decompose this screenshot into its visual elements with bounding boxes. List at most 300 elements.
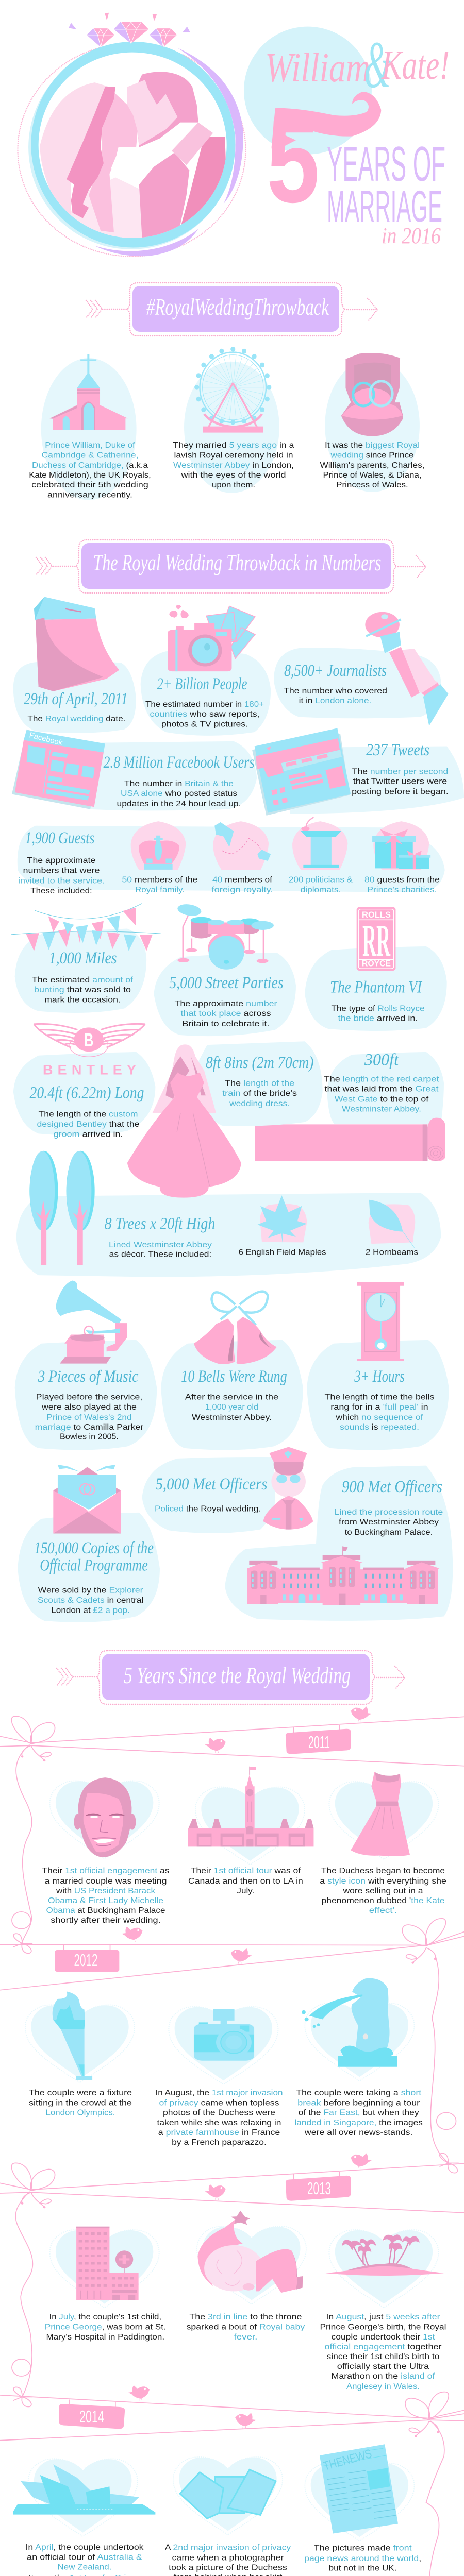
panel: 3 pieces of music — [15, 1280, 157, 1450]
year: 2012: 2012 — [74, 1951, 98, 1970]
title: William: William — [265, 45, 370, 91]
year: 2014: 2014 — [79, 2407, 104, 2426]
heart background — [305, 2463, 414, 2541]
text: married in Westminster Abbey: with the eyes of the world — [180, 471, 286, 480]
panel: the Phantom VI — [305, 907, 447, 1031]
text: biggest wedding — [320, 441, 425, 489]
icon: hornbeam leaf — [369, 1200, 415, 1248]
text: hours: which no sequence of — [335, 1413, 423, 1422]
text: tweets: The number per second — [352, 768, 448, 776]
text: programmes — [38, 1586, 143, 1615]
icon: photographs — [180, 2470, 276, 2518]
text: guests breakdown: 80 guests from the — [364, 875, 440, 884]
icon: Facebook page — [12, 730, 105, 809]
text: biggest wedding: It was the biggest Royal — [325, 441, 420, 450]
panel: 2012 Singapore — [294, 1978, 423, 2137]
text: hours: The length of time the bells — [325, 1393, 435, 1401]
timeline ribbons and signs — [0, 1706, 464, 2576]
heading: 3+ Hours: 3+ Hours — [354, 1367, 405, 1386]
icon: maple leaf — [257, 1195, 307, 1243]
heading: 29th of April, 2011: 29th of April, 2011 — [24, 690, 128, 708]
panel: Bentley — [13, 1024, 155, 1139]
title: in 2016: in 2016 — [382, 223, 441, 248]
icon: envelope — [53, 1465, 121, 1534]
ribbon: small loop 2012 — [437, 2112, 456, 2129]
text: wedding date: The Royal wedding date. — [27, 715, 125, 723]
text: Facebook users: updates in the 24 hour lead up. — [117, 800, 241, 808]
text: street parties — [174, 999, 277, 1028]
banner: The Royal Wedding Throwback in Numbers — [36, 540, 426, 593]
background blob — [15, 929, 146, 1013]
text: Anglesey: In August , just 5 weeks after — [326, 2313, 440, 2321]
text: second invasion: A 2nd major invasion of privacy — [165, 2543, 291, 2552]
text: bells: 1,000 year old — [205, 1403, 258, 1412]
text: biggest wedding: William's parents, Charles, — [320, 461, 425, 470]
icon: bunting — [11, 904, 161, 951]
text: bunting: The estimated amount of — [32, 976, 134, 985]
background blob — [154, 953, 296, 1036]
text: guests intro: These included: — [30, 887, 92, 895]
text: guests intro: The approximate — [27, 856, 95, 865]
icon: Sydney Opera House — [13, 2464, 155, 2515]
text: lined the route: to Buckingham Palace. — [345, 1528, 433, 1537]
heart background — [197, 2226, 306, 2304]
heading: 150,000 Copies of the Official Programme: 150,000 Copies of the — [34, 1539, 154, 1557]
panel: 2+ billion people — [141, 605, 271, 736]
text: Olympics: sitting in the crowd at the — [29, 2099, 132, 2107]
banner: #RoyalWeddingThrowback — [86, 283, 377, 336]
background blob — [225, 1466, 453, 1621]
panel: 237 tweets — [252, 728, 464, 816]
icon: red carpet roll — [255, 1118, 445, 1161]
text: carpet: West Gate to the top of — [335, 1095, 429, 1104]
icon: crown — [139, 836, 179, 870]
year: 2011: 2011 — [308, 1733, 330, 1752]
text: street parties: that took place across — [180, 1009, 271, 1018]
icon: Twitter page — [252, 728, 351, 816]
text: trees — [109, 1241, 212, 1259]
icon: Olympic torch — [53, 1991, 92, 2080]
portrait: couple kissing — [40, 72, 226, 238]
text: guests intro: invited to the service. — [18, 877, 105, 886]
heading: 20.4ft (6.22m) Long: 20.4ft (6.22m) Long — [30, 1083, 144, 1102]
icon backgrounds — [131, 821, 429, 870]
text: first engagement — [42, 1867, 170, 1925]
heading: 3 Pieces of Music: 3 Pieces of Music — [38, 1367, 139, 1386]
text: Phantom: The type of Rolls Royce — [331, 1005, 425, 1013]
text: Olympics: The couple were a fixture — [29, 2089, 132, 2097]
text: Australia tour — [26, 2543, 144, 2576]
heading: 1,000 Miles: 1,000 Miles — [49, 949, 117, 968]
icon: police officer — [263, 1447, 313, 1530]
icon: Merlion — [302, 1978, 397, 2067]
ribbon: left string 2013 — [15, 2192, 29, 2226]
ribbon junction: 2013 sign — [0, 2154, 464, 2213]
text: Anglesey: since their 1st child's birth to — [327, 2352, 439, 2361]
heading: 300ft: 300ft — [364, 1051, 399, 1070]
text: Bentley: The length of the custom — [38, 1110, 138, 1119]
background blob — [305, 946, 447, 1031]
icon: plane and route — [214, 822, 271, 861]
heading: 150,000 Copies of the Official Programme — [34, 1539, 154, 1574]
text: Facebook users: USA alone who posted status — [121, 789, 237, 798]
text: bells — [185, 1393, 278, 1422]
background blob — [177, 1041, 323, 1126]
heart background — [50, 1781, 159, 1859]
heading: 150,000 Copies of the Official Programme: Official Programme — [40, 1556, 148, 1574]
icon: Obama portrait — [74, 1777, 136, 1857]
panel: 1,000 miles of bunting — [11, 904, 161, 1013]
panel: 2011 style icon — [320, 1772, 446, 1915]
logo text: Bentley: BENTLEY — [43, 1062, 136, 1078]
text: train: wedding dress. — [229, 1099, 290, 1108]
text: music: Bowles in 2005. — [60, 1433, 119, 1442]
text: married in Westminster Abbey: upon them. — [212, 481, 255, 489]
heading: 10 Bells Were Rung: 10 Bells Were Rung — [181, 1367, 287, 1386]
heart background — [305, 2003, 414, 2081]
panel: 2014 Australia tour — [13, 2459, 155, 2576]
background blob — [307, 1340, 449, 1450]
panel: 2012 Olympics — [25, 1991, 135, 2117]
heading: 1,900 Guests: 1,900 Guests — [25, 829, 95, 848]
text: journalists: it in London alone. — [299, 697, 371, 705]
text: bunting — [32, 976, 134, 1005]
heading: 2+ Billion People: 2+ Billion People — [157, 675, 247, 693]
icon: gramophone — [56, 1280, 127, 1364]
text: Phantom: the bride arrived in. — [338, 1014, 418, 1023]
panel: 10 bells — [161, 1292, 303, 1450]
text: tweets: posting before it began. — [352, 787, 449, 796]
text: guests intro — [18, 856, 105, 895]
icon: podium — [301, 817, 342, 868]
text: first tour: July. — [237, 1887, 254, 1895]
text: Australia tour: In April , the couple undertook — [26, 2543, 144, 2552]
text: Phantom — [331, 1005, 425, 1023]
text: music: Prince of Wales's 2nd — [46, 1413, 132, 1422]
heading: 5,000 Street Parties: 5,000 Street Parties — [169, 974, 284, 992]
background blob — [327, 1052, 444, 1124]
text: bunting: bunting that was sold to — [34, 986, 131, 994]
ribbon: small loop 2013 — [12, 2359, 31, 2376]
icon: Kate dress — [351, 1772, 410, 1856]
panel: 3+ hours — [307, 1282, 449, 1450]
heart background — [329, 2230, 439, 2308]
panel: 2011 Obama engagement — [42, 1777, 170, 1925]
text: first engagement: Obama at Buckingham Palace — [46, 1906, 165, 1915]
panel: 5,000 street parties — [154, 902, 296, 1036]
background blob — [274, 648, 441, 718]
text: guests breakdown: 200 politicians & — [289, 875, 353, 884]
icon: hospital — [76, 2227, 139, 2300]
background blob — [18, 1513, 160, 1622]
icon: microphone in hand — [365, 612, 449, 726]
title background circle — [244, 27, 372, 155]
banner: #RoyalWeddingThrowback: #RoyalWeddingThrowback — [146, 294, 329, 320]
panel: 2013 island of Anglesey — [320, 2230, 446, 2391]
text: royals celebrated — [29, 441, 151, 499]
background blob — [161, 1340, 303, 1450]
heart background — [329, 1782, 439, 1859]
heart background — [28, 2459, 138, 2536]
portrait frame lilac crescent — [95, 48, 243, 256]
panel: 1,900 guests — [18, 817, 445, 895]
text: baby fever: fever. — [234, 2333, 257, 2342]
text: bells: Westminster Abbey. — [192, 1413, 272, 1422]
text: hours: rang for in a 'full peal' in — [330, 1403, 428, 1412]
panel: 2011 Canada tour — [188, 1767, 313, 1895]
text: George born: Prince George , was born at St. — [45, 2323, 166, 2332]
text: guests breakdown: Prince's charities. — [367, 886, 437, 894]
text: journalists: The number who covered — [284, 687, 387, 696]
portrait frame pale ring — [28, 45, 234, 249]
text: married in Westminster Abbey — [173, 441, 294, 489]
text: style icon — [320, 1867, 446, 1915]
text: billion people: photos & TV pictures. — [161, 720, 248, 729]
logo text: B: B — [84, 1029, 94, 1050]
icon: paparazzo camera — [194, 2009, 254, 2061]
logo text: Royce: ROYCE — [362, 958, 391, 969]
background oval — [184, 362, 279, 493]
background blob — [141, 651, 271, 736]
numeral 5: 5 — [267, 95, 320, 227]
icon: Rolls Royce badge — [357, 907, 395, 971]
text: royals celebrated: Duchess of Cambridge, (a.k.a — [32, 461, 148, 470]
text: baby fever — [187, 2313, 305, 2342]
banner: 5 Years Since the Royal Wedding — [57, 1651, 405, 1704]
icon: camera and photos — [168, 605, 255, 671]
background blob — [142, 1457, 275, 1533]
ribbon junction: 2014 sign — [0, 2385, 464, 2441]
ribbon: small bow 2012 — [439, 2154, 459, 2173]
icon: three diamonds — [69, 13, 190, 47]
text: Australia tour: an official tour of Australia & — [27, 2553, 143, 2562]
icon: wedding bells — [194, 1292, 277, 1364]
text: Singapore: landed in Singapore, the images — [294, 2119, 423, 2127]
header: title and portrait — [18, 13, 450, 257]
heading: The Phantom VI: The Phantom VI — [330, 978, 423, 996]
text: Anglesey: Anglesey in Wales. — [346, 2382, 420, 2391]
ribbon: small loop 2011 — [12, 1912, 31, 1929]
text: guests breakdown: Royal family. — [135, 886, 185, 894]
text: journalists — [284, 687, 387, 705]
text: carpet: that was laid from the Great — [325, 1084, 439, 1093]
text: guests breakdown: 50 members of the — [122, 875, 198, 884]
text: royals celebrated: anniversary recently. — [47, 490, 132, 499]
text: Anglesey — [320, 2313, 446, 2391]
text: first engagement: with US President Barack — [56, 1887, 155, 1895]
text: music — [35, 1393, 143, 1442]
text: Facebook users: The number in Britain & the — [124, 779, 234, 788]
icon: wedding dress — [127, 1044, 241, 1198]
text: Bentley: designed Bentley that the — [37, 1120, 139, 1129]
text: guests breakdown — [122, 875, 440, 894]
text: Singapore: of the Far East, but when they — [299, 2108, 419, 2117]
text: style icon: phenomenon dubbed ' the Kate — [322, 1896, 444, 1905]
background oval — [41, 358, 137, 500]
text: carpet: The length of the red carpet — [324, 1075, 439, 1083]
text: married in Westminster Abbey: They married 5 years ago in a — [173, 441, 294, 450]
panel: 150,000 programmes — [18, 1465, 160, 1622]
text: train: The length of the — [225, 1079, 294, 1088]
panel: the Phantom VI: RR — [362, 916, 391, 966]
text: policed: Policed the Royal wedding. — [155, 1504, 261, 1514]
text: front page: page news around the world , — [304, 2554, 421, 2563]
text: Anglesey: couple undertook their 1st — [331, 2333, 435, 2342]
text: trees: as décor. These included: — [109, 1250, 211, 1259]
text: lined the route: Lined the procession route — [335, 1508, 443, 1517]
text: royals celebrated: celebrated their 5th wedding — [31, 481, 148, 489]
text: guests intro: numbers that were — [23, 866, 100, 875]
icon: Canadian parliament — [188, 1767, 313, 1846]
text: first tour — [188, 1867, 303, 1895]
text: Anglesey: officially start the Ultra — [337, 2362, 429, 2371]
text: privacy: taken while she was relaxing in — [157, 2119, 281, 2127]
ribbon junction: 2011 sign — [0, 1706, 464, 1766]
text: married in Westminster Abbey: lavish Royal ceremony held in — [174, 451, 293, 460]
text: privacy: a private farmhouse in France — [158, 2128, 280, 2137]
ribbon: right string 2014 — [426, 2421, 444, 2576]
text: first engagement: Their 1st official engagement as — [42, 1867, 170, 1875]
text: first engagement: Obama & First Lady Michelle — [48, 1896, 163, 1905]
heading: 8,500+ Journalists: 8,500+ Journalists — [284, 662, 387, 680]
text: privacy — [156, 2089, 283, 2147]
text: hours — [325, 1393, 435, 1432]
text: biggest wedding: Princess of Wales. — [336, 481, 408, 489]
label: The News masthead: THENEWS — [322, 2447, 373, 2473]
text: second invasion: came when a photographer — [172, 2553, 284, 2563]
text: George born: In July, the couple's 1st child, — [49, 2313, 161, 2321]
text: hours: sounds is repeated. — [340, 1423, 419, 1432]
panel: ring box, biggest Royal wedding — [320, 353, 425, 492]
heading: 2.8 Million Facebook Users: 2.8 Million Facebook Users — [103, 753, 255, 772]
text: privacy: of privacy came when topless — [159, 2099, 279, 2107]
heart background — [169, 2007, 278, 2084]
text: married in Westminster Abbey: Westminster Abbey in London, — [173, 461, 294, 470]
text: Singapore: The couple were taking a short — [296, 2089, 422, 2097]
heart background — [195, 1787, 305, 1865]
text: second invasion: took a picture of the Duchess — [169, 2564, 287, 2572]
text: programmes: London at £2 a pop. — [51, 1606, 130, 1615]
text: Olympics: London Olympics. — [45, 2108, 115, 2117]
text: baby fever: sparked a bout of Royal baby — [187, 2323, 305, 2332]
text: Olympics — [29, 2089, 132, 2117]
text: royals celebrated: Kate Middleton), the UK Royals, — [29, 471, 151, 480]
background blob — [16, 1193, 441, 1277]
background oval — [325, 359, 420, 492]
icon: gifts — [372, 829, 430, 869]
text: street parties: The approximate number — [174, 999, 277, 1008]
text: style icon: The Duchess began to become — [321, 1867, 445, 1875]
ribbon junction: 2012 sign — [0, 1919, 464, 1990]
icon: calendar — [34, 597, 119, 691]
text: biggest wedding: wedding since Prince — [330, 451, 413, 460]
text: billion people: The estimated number in 180+ — [145, 700, 264, 709]
text: bunting: mark the occasion. — [44, 995, 121, 1005]
panel: 5,000 Met officers — [142, 1447, 313, 1533]
panel: 2013 Royal baby fever — [187, 2211, 306, 2342]
text: maples: 6 English Field Maples — [239, 1248, 326, 1257]
text: privacy: In August, the 1st major invasion — [156, 2089, 283, 2097]
icon: two trees — [29, 1151, 95, 1265]
text: programmes: Were sold by the Explorer — [38, 1586, 143, 1595]
text: Singapore — [294, 2089, 423, 2137]
text: programmes: Scouts & Cadets in central — [38, 1596, 143, 1605]
text: Singapore: break before beginning a tour — [297, 2099, 420, 2107]
text: style icon: a style icon with everything she — [320, 1877, 446, 1886]
icon: London Eye wheel — [194, 347, 271, 433]
numeral 5 swash — [272, 92, 381, 151]
heading: 900 Met Officers: 900 Met Officers — [342, 1478, 442, 1496]
text: music: were also played at the — [41, 1403, 137, 1412]
text: front page: The pictures made front — [314, 2544, 412, 2553]
panel: 2014 front page news — [304, 2444, 421, 2573]
text: Australia tour: New Zealand. — [58, 2563, 111, 2571]
background blob — [290, 747, 464, 814]
text: billion people — [145, 700, 264, 729]
text: biggest wedding: Prince of Wales, & Diana, — [323, 471, 422, 480]
text: tweets: that Twitter users were — [353, 777, 447, 786]
heart background — [173, 2457, 283, 2535]
title: ampersand: & — [364, 28, 391, 102]
panel: wedding date — [13, 597, 136, 733]
text: first tour: Canada and then on to LA in — [188, 1877, 303, 1886]
text: trees: Lined Westminster Abbey — [109, 1241, 212, 1249]
icon: drum kit — [174, 902, 274, 970]
icon: grandfather clock — [357, 1282, 404, 1361]
text: Singapore: were all over news-stands. — [304, 2128, 412, 2137]
panel: London Eye, married 5 years ago — [173, 347, 294, 493]
text: privacy: by a French paparazzo. — [172, 2138, 267, 2147]
text: music: Played before the service, — [36, 1393, 142, 1401]
portrait frame cyan ring — [31, 42, 235, 247]
text: second invasion — [165, 2543, 291, 2576]
icon: ring box — [341, 353, 403, 436]
ribbon: right string 2012 — [430, 1955, 449, 2163]
portrait white centre — [39, 53, 227, 238]
portrait frame dotted ring — [18, 43, 245, 257]
text: Bentley — [37, 1110, 139, 1139]
text: baby fever: The 3rd in line to the throne — [189, 2313, 302, 2321]
text: lined the route: from Westminster Abbey — [339, 1518, 439, 1527]
panel: 2012 invasion of privacy — [156, 2007, 283, 2147]
panel: 2.8 million Facebook users — [12, 730, 257, 810]
text: billion people: countries who saw reports, — [150, 710, 260, 719]
text: Anglesey: Prince George's birth, the Royal — [320, 2323, 446, 2332]
panel: 900 Met officers — [225, 1466, 453, 1621]
text: tweets — [352, 768, 449, 796]
panel: 8,500+ journalists — [274, 612, 449, 726]
icon: newspaper — [320, 2444, 398, 2534]
background blob — [13, 662, 136, 733]
text: Facebook users — [117, 779, 241, 808]
text: Bentley: groom arrived in. — [54, 1130, 123, 1139]
background blob — [15, 1340, 157, 1450]
icon: church — [49, 354, 128, 430]
panel: 300ft carpet — [255, 1051, 445, 1161]
text: first engagement: shortly after their wedding. — [51, 1916, 161, 1925]
text: George born: Mary's Hospital in Paddington. — [46, 2333, 164, 2342]
text: privacy: photos of the Duchess were — [163, 2108, 275, 2117]
text: first engagement: a married couple was meeting — [44, 1877, 167, 1886]
text: first tour: Their 1st official tour was of — [191, 1867, 301, 1875]
text: street parties: Britain to celebrate it. — [183, 1020, 269, 1028]
text: Anglesey: official engagement together — [325, 2343, 441, 2351]
text: train — [222, 1079, 297, 1108]
text: style icon: effect'. — [369, 1906, 397, 1915]
panel: 8ft 8ins dress train — [127, 1041, 323, 1198]
heading: 8ft 8ins (2m 70cm): 8ft 8ins (2m 70cm) — [206, 1054, 313, 1072]
heading: 8 Trees x 20ft High: 8 Trees x 20ft High — [104, 1215, 216, 1233]
